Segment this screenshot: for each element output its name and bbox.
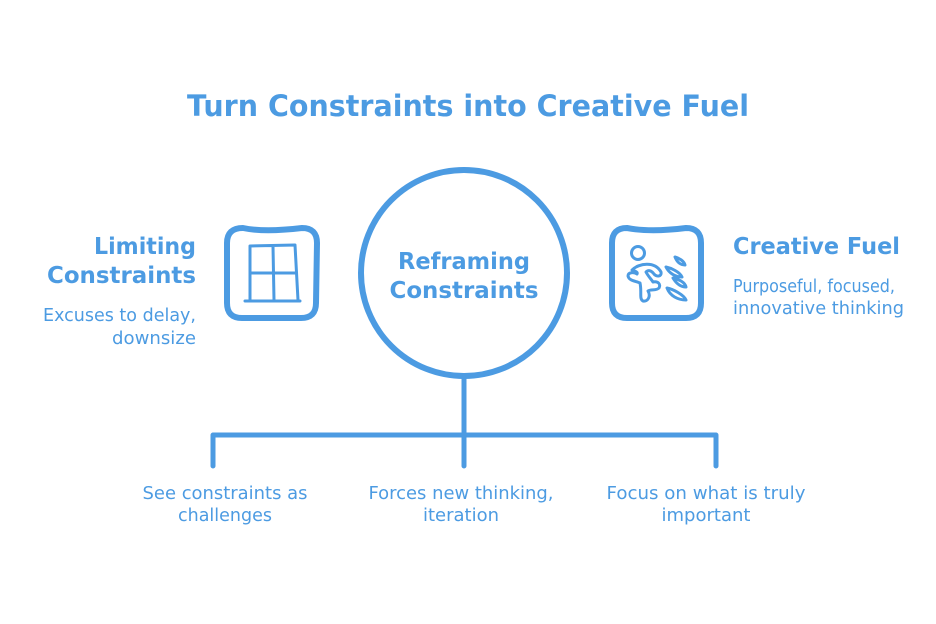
heading: limiting constraints — [47, 234, 196, 289]
text: focus on what is truly important: important — [662, 506, 751, 526]
heading: limiting constraints: Constraints — [47, 263, 196, 289]
text: creative fuel description — [733, 277, 904, 319]
text: limiting description: downsize — [112, 329, 196, 349]
text: see constraints as challenges: challenges — [178, 506, 272, 526]
text: forces new thinking: iteration — [423, 506, 499, 526]
panel: limiting constraints text — [43, 234, 196, 349]
text: forces new thinking: Forces new thinking, — [368, 484, 554, 504]
panel: creative fuel text — [733, 234, 904, 319]
text: limiting description: Excuses to delay, — [43, 306, 196, 326]
text: focus on what is truly important: Focus on what is truly — [606, 484, 806, 504]
icon: running figure with wind — [612, 228, 701, 318]
text: forces new thinking — [368, 484, 554, 526]
text: creative fuel description: innovative thinking — [733, 299, 904, 319]
tree connector — [213, 376, 716, 466]
title: Turn Constraints into Creative Fuel — [187, 89, 749, 123]
text: see constraints as challenges: See constraints as — [142, 484, 308, 504]
heading: creative fuel: Creative Fuel — [733, 234, 900, 260]
text: limiting description — [43, 306, 196, 349]
center circle: reframing constraints: Reframing — [398, 249, 530, 275]
center circle: reframing constraints — [361, 170, 567, 376]
heading: limiting constraints: Limiting — [94, 234, 196, 260]
text: focus on what is truly important — [606, 484, 806, 526]
text: creative fuel description: Purposeful, focused, — [733, 277, 895, 297]
icon: window — [227, 228, 317, 318]
center circle: reframing constraints: Constraints — [390, 278, 538, 304]
text: see constraints as challenges — [142, 484, 308, 526]
